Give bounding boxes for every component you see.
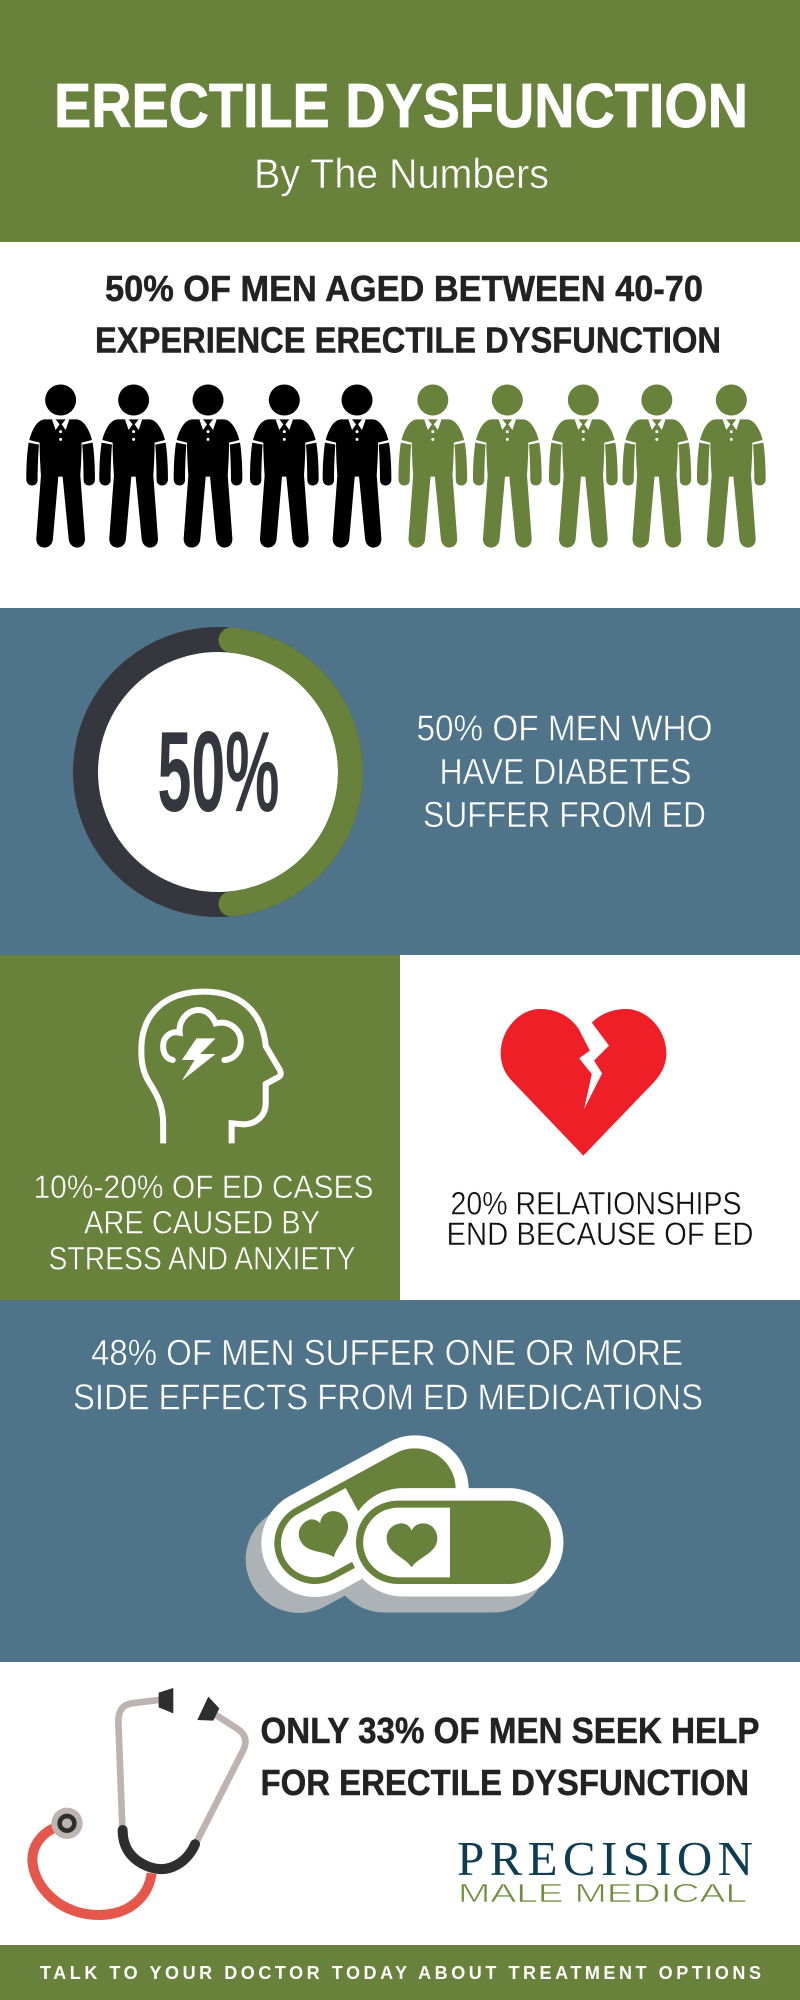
panel: diabetes: [0, 608, 800, 955]
pictogram: five black men: [26, 384, 391, 548]
heading: 50% OF MEN AGED BETWEEN 40-70: [105, 268, 703, 309]
panel: men aged 40-70: [0, 242, 800, 608]
stress statistic text: 10%-20% OF ED CASES: [34, 1169, 374, 1205]
icon: head with storm cloud: [141, 992, 281, 1143]
relationships statistic text: 20% RELATIONSHIPS: [450, 1186, 742, 1222]
stress statistic text: STRESS AND ANXIETY: [48, 1240, 356, 1276]
relationships statistic text: [446, 1186, 754, 1252]
icon: stethoscope: [32, 1688, 245, 1915]
heading: [95, 268, 721, 360]
icon: broken heart: [501, 1009, 666, 1156]
panel: footer: [0, 1945, 800, 2000]
seek help statistic text: [260, 1710, 760, 1803]
panel: header: [0, 0, 800, 242]
diabetes statistic text: 50% OF MEN WHO: [416, 708, 712, 748]
diabetes statistic text: SUFFER FROM ED: [423, 794, 706, 835]
side effects statistic text: SIDE EFFECTS FROM ED MEDICATIONS: [73, 1376, 703, 1418]
seek help statistic text: ONLY 33% OF MEN SEEK HELP: [260, 1710, 760, 1751]
panel: relationships: [400, 955, 800, 1300]
donut chart: 50%: [86, 640, 350, 904]
logo: Precision Male Medical: PRECISION: [457, 1831, 753, 1886]
pictogram: five green men: [398, 384, 766, 548]
donut value: 50%: [158, 709, 280, 836]
panel: medication side effects: [0, 1300, 800, 1662]
subtitle: By The Numbers: [254, 150, 549, 197]
panel: seek help: [0, 1662, 800, 1945]
footer call to action: TALK TO YOUR DOCTOR TODAY ABOUT TREATMENT OPTIONS: [40, 1963, 761, 1983]
heading: EXPERIENCE ERECTILE DYSFUNCTION: [95, 320, 721, 360]
relationships statistic text: END BECAUSE OF ED: [446, 1216, 754, 1252]
icon: pills: [269, 1488, 509, 1589]
side effects statistic text: [73, 1332, 703, 1418]
logo: Precision Male Medical: MALE MEDICAL: [458, 1878, 747, 1908]
stress statistic text: ARE CAUSED BY: [84, 1204, 320, 1240]
stress statistic text: [34, 1169, 374, 1276]
diabetes statistic text: HAVE DIABETES: [440, 751, 692, 792]
panel: stress and anxiety: [0, 955, 400, 1300]
seek help statistic text: FOR ERECTILE DYSFUNCTION: [260, 1762, 749, 1803]
diabetes statistic text: [416, 708, 712, 835]
side effects statistic text: 48% OF MEN SUFFER ONE OR MORE: [91, 1332, 683, 1373]
